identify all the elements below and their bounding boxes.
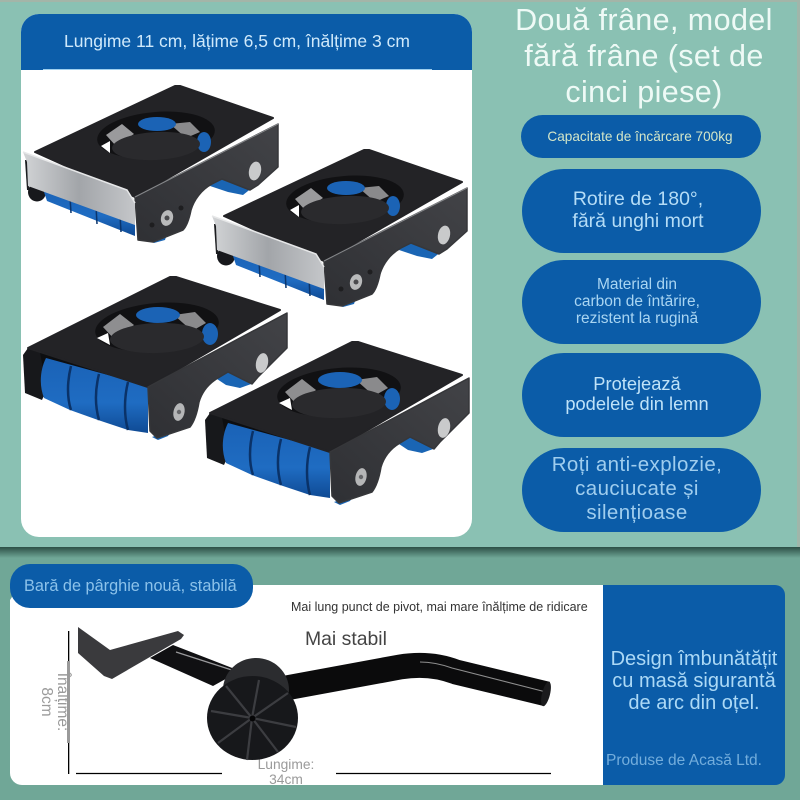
top section background — [0, 0, 800, 547]
stability label: Mai stabil — [305, 628, 387, 650]
feature pill: floor protection: podelele din lemn — [565, 393, 709, 414]
lever heading pill: Bară de pârghie nouă, stabilă — [24, 577, 238, 595]
bottom section background — [0, 547, 800, 800]
panel: product dimensions — [21, 14, 472, 537]
title: Două frâne, model — [515, 3, 773, 37]
length dimension line — [76, 772, 551, 774]
feature pill: material — [522, 260, 761, 344]
feature pill: floor protection — [522, 353, 761, 437]
company name: Produse de Acasă Ltd. — [606, 752, 762, 769]
lever panel background — [10, 585, 603, 785]
height label: Înălțime: — [54, 672, 71, 731]
lever heading pill — [10, 564, 253, 608]
panel header band — [21, 14, 472, 70]
design description: Design îmbunătățit — [611, 648, 778, 670]
design description: de arc din oțel. — [628, 692, 760, 714]
feature pill: floor protection: Protejează — [593, 373, 682, 394]
feature pill: wheels: Roți anti-explozie, — [552, 453, 722, 476]
title: fără frâne (set de — [524, 39, 764, 73]
pivot note: Mai lung punct de pivot, mai mare înălțime de ridicare — [291, 600, 588, 614]
feature pill: material: rezistent la rugină — [576, 310, 699, 327]
feature pill: load capacity: Capacitate de încărcare 700kg — [547, 129, 733, 144]
feature pill: material: Material din — [597, 276, 677, 293]
design description: cu masă sigurantă — [612, 670, 777, 692]
product: roller without brake, front right — [205, 342, 469, 505]
lever bar product — [78, 627, 553, 760]
feature pill: material: carbon de întărire, — [574, 293, 700, 310]
feature pill: load capacity — [521, 115, 761, 158]
feature pill: wheels: cauciucate și — [575, 477, 699, 500]
product: roller with brake, rear left — [23, 86, 278, 243]
length label: 34cm — [269, 772, 303, 787]
height dimension line — [67, 631, 70, 774]
panel background — [21, 14, 472, 537]
panel: lever bar — [10, 564, 603, 787]
dimensions heading: Lungime 11 cm, lățime 6,5 cm, înălțime 3 cm — [64, 31, 410, 51]
product: roller without brake, front left — [23, 277, 287, 440]
title: cinci piese) — [565, 75, 723, 109]
height label: 8cm — [38, 687, 55, 717]
feature pill: rotation: fără unghi mort — [572, 210, 704, 232]
product: roller with brake, rear right — [212, 150, 467, 307]
feature pill: rotation — [522, 169, 761, 253]
feature pill: wheels — [522, 448, 761, 532]
length label: Lungime: — [258, 757, 314, 772]
feature pill: rotation: Rotire de 180°, — [573, 188, 703, 210]
panel: improved design — [603, 585, 785, 785]
feature pill: wheels: silențioase — [586, 501, 688, 524]
